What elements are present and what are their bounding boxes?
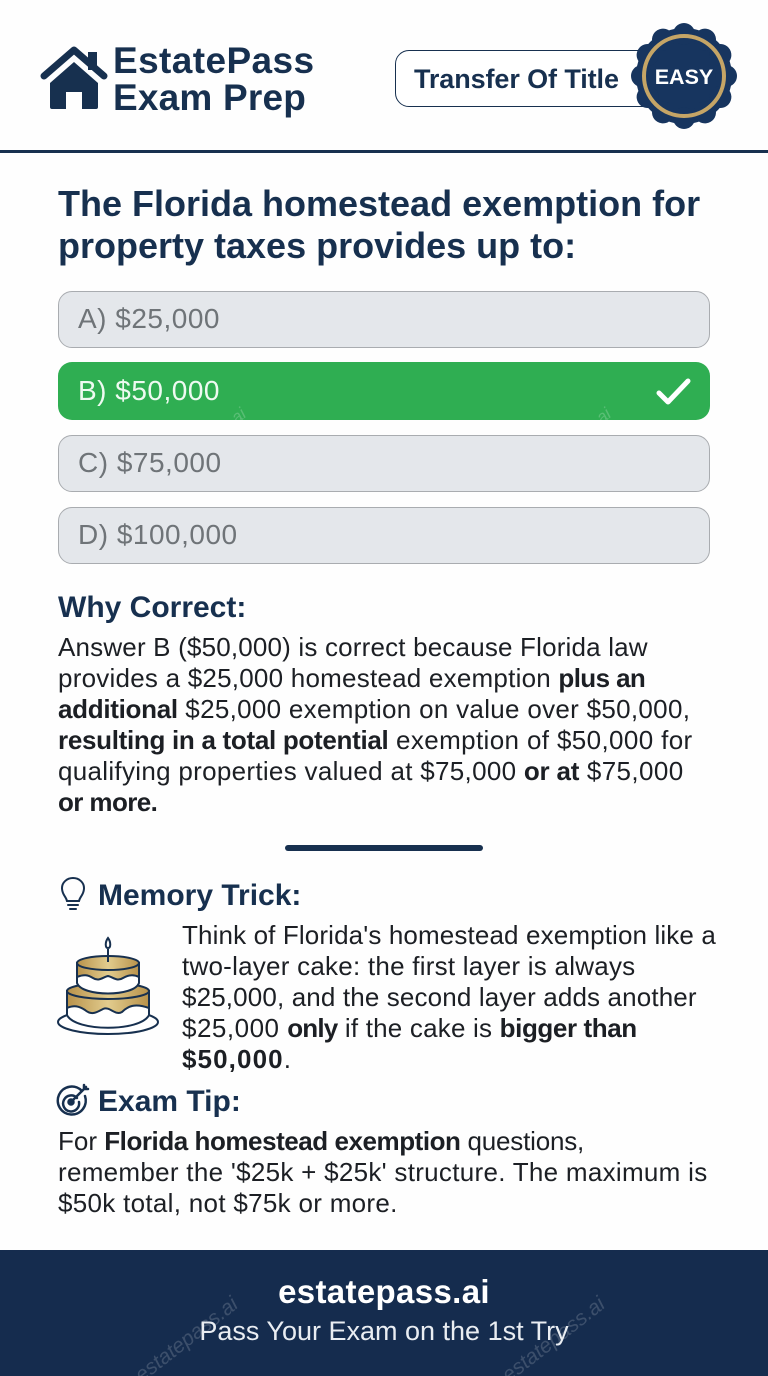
why correct text: resulting in a total potential exemption of $50,000 for xyxy=(58,725,693,755)
option D: D) $100,000 xyxy=(78,519,238,550)
heading: memory trick: Memory Trick: xyxy=(98,879,301,912)
why correct text: additional $25,000 exemption on value over $50,000, xyxy=(58,694,690,724)
option C xyxy=(58,435,710,492)
why correct text: Answer B ($50,000) is correct because Florida law xyxy=(58,632,648,662)
logo text: EstatePass xyxy=(113,40,314,81)
option B correct xyxy=(58,362,710,420)
logo text: Exam Prep xyxy=(113,77,306,118)
memory trick text: two-layer cake: the first layer is always xyxy=(182,951,635,981)
footer xyxy=(0,1250,768,1376)
why correct text xyxy=(58,632,693,817)
why correct text: or more. xyxy=(58,787,157,817)
icon: house logo xyxy=(40,46,108,109)
icon: light bulb xyxy=(61,877,85,910)
footer tagline: Pass Your Exam on the 1st Try xyxy=(199,1316,569,1346)
difficulty badge: EASY xyxy=(655,65,713,89)
heading: why correct: Why Correct: xyxy=(58,591,246,624)
question: The Florida homestead exemption for xyxy=(58,183,700,224)
option A xyxy=(58,291,710,348)
header rule xyxy=(0,150,768,153)
topic pill xyxy=(395,50,665,107)
memory trick text xyxy=(182,920,716,1074)
difficulty badge xyxy=(631,23,737,129)
memory trick text: Think of Florida's homestead exemption like a xyxy=(182,920,716,950)
memory trick text: $50,000. xyxy=(182,1044,291,1074)
exam tip text xyxy=(58,1126,708,1218)
header xyxy=(40,23,737,129)
question: property taxes provides up to: xyxy=(58,225,576,266)
exam tip text: $50k total, not $75k or more. xyxy=(58,1188,398,1218)
logo text xyxy=(113,40,314,118)
memory trick text: $25,000, and the second layer adds another xyxy=(182,982,697,1012)
footer site name: estatepass.ai xyxy=(278,1273,490,1310)
memory trick text: $25,000 only if the cake is bigger than xyxy=(182,1013,637,1043)
option B correct: B) $50,000 xyxy=(78,375,220,406)
topic pill: Transfer Of Title xyxy=(414,64,619,94)
option D xyxy=(58,507,710,564)
exam tip text: remember the '$25k + $25k' structure. The maximum is xyxy=(58,1157,708,1187)
why correct text: provides a $25,000 homestead exemption plus an xyxy=(58,663,645,693)
exam tip text: For Florida homestead exemption questions, xyxy=(58,1126,584,1156)
option C: C) $75,000 xyxy=(78,447,222,478)
icon: target xyxy=(56,1084,90,1116)
why correct text: qualifying properties valued at $75,000 or at $75,000 xyxy=(58,756,684,786)
heading: exam tip: Exam Tip: xyxy=(98,1085,241,1118)
option A: A) $25,000 xyxy=(78,303,220,334)
icon: cake xyxy=(57,936,159,1035)
question xyxy=(58,183,700,266)
